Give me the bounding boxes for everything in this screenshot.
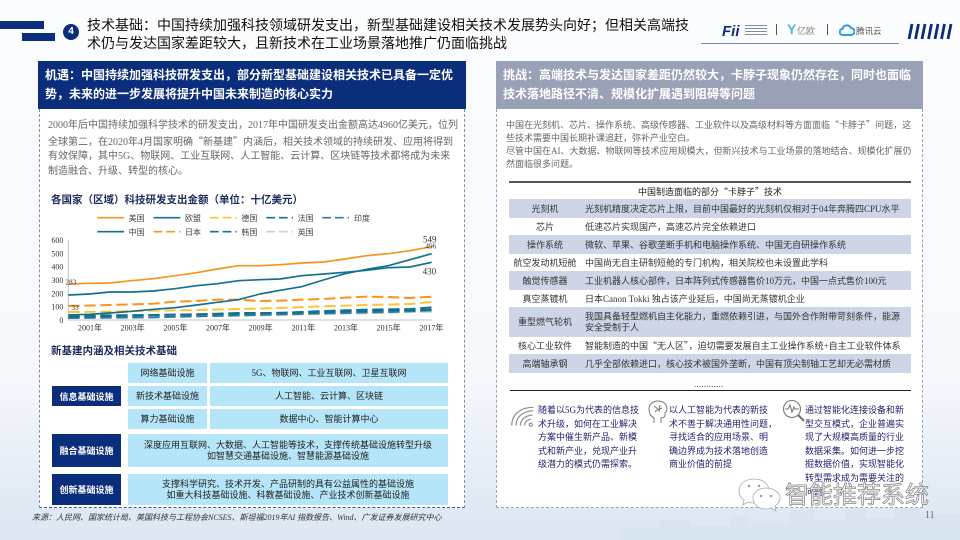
row: 网络: 网络基础设施 bbox=[140, 368, 194, 378]
opportunity text: 有效保障，其中5G、物联网、工业互联网、人工智能、云计算、区块链等技术都将成为未来 bbox=[48, 151, 450, 162]
infrastructure table: 深度应用互联网、大数据、人工智能等技术，支撑传统基础设施转型升级 bbox=[144, 440, 432, 450]
infrastructure table bbox=[52, 363, 448, 505]
legend: 法国 bbox=[298, 213, 314, 223]
challenge text bbox=[506, 118, 912, 169]
category: 融合基础设施 bbox=[52, 434, 121, 467]
data labels bbox=[65, 235, 437, 312]
row: 操作系统 bbox=[509, 235, 911, 254]
challenge text: 中国在光刻机、芯片、操作系统、高级传感器、工业软件以及高级材料等方面面临“卡脖子”问题，这 bbox=[506, 118, 911, 131]
icon: AI head bbox=[648, 400, 668, 423]
row: 航空发动机短舱: 中国尚无自主研制短舱的专门机构，相关院校也未设置此学科 bbox=[585, 257, 828, 267]
axes: 2007年 bbox=[206, 322, 230, 332]
source note: 来源：人民网、国家统计局、美国科技与工程协会NCSES、斯坦福2019年AI 指数报告、Wind、广发证券发展研究中心 bbox=[32, 513, 442, 522]
opportunity text: 2000年后中国持续加强科学技术的研发支出，2017年中国研发支出金额高达4960亿美元，位列 bbox=[48, 120, 458, 131]
challenge text: 然面临很多问题。 bbox=[506, 159, 578, 169]
icon: magnifier bbox=[783, 400, 805, 422]
infrastructure table: 如重大科技基础设施、科教基础设施、产业技术创新基础设施 bbox=[166, 490, 410, 500]
row: 重型燃气轮机 bbox=[509, 307, 911, 337]
row: 操作系统: 微软、苹果、谷歌垄断手机和电脑操作系统、中国无自研操作系统 bbox=[585, 239, 846, 249]
category: 创新基础设施 bbox=[52, 474, 121, 505]
axes: 2015年 bbox=[377, 322, 401, 332]
row: 核心工业软件: 智能制造的中国“无人区”，迫切需要发展自主工业操作系统+自主工业软件体系 bbox=[585, 338, 901, 351]
row: 高端轴承钢: 几乎全部依赖进口，核心技术被国外垄断，中国有顶尖制轴工艺却无必需材质 bbox=[585, 358, 891, 368]
opportunity heading: 机遇：中国持续加强科技研发支出，部分新型基础建设相关技术已具备一定优 bbox=[45, 68, 453, 82]
opportunity text bbox=[48, 119, 458, 176]
row: 高端轴承钢: 高端轴承钢 bbox=[522, 358, 568, 368]
logo: Fii: Fii bbox=[722, 23, 740, 40]
partner logos bbox=[701, 20, 899, 44]
row: 算力 bbox=[128, 409, 207, 429]
panel body bbox=[496, 109, 923, 508]
icon: wechat bbox=[738, 478, 780, 512]
legend: 欧盟 bbox=[185, 213, 201, 223]
row: 光刻机: 光刻机精度决定芯片上限，目前中国最好的光刻机仅相对于04年奔腾四CPU水平 bbox=[585, 203, 900, 213]
watermark bbox=[738, 478, 929, 512]
text: 5G: 方案中催生新产品、新模 bbox=[538, 432, 637, 442]
row: 操作系统: 操作系统 bbox=[527, 239, 563, 249]
legend: 印度 bbox=[354, 213, 370, 223]
challenge heading: 挑战：高端技术与发达国家差距仍然较大，卡脖子现象仍然存在，同时也面临 bbox=[503, 68, 911, 82]
text: data: 问题 bbox=[805, 487, 823, 497]
axes: 2003年 bbox=[121, 322, 145, 332]
text: data: 型交互模式，企业普遍实 bbox=[805, 419, 904, 429]
data labels: 430 bbox=[423, 266, 437, 276]
row: 触觉传感器 bbox=[509, 271, 911, 290]
header accent bars bbox=[0, 21, 55, 41]
axes: 600 bbox=[51, 236, 63, 245]
logo: 亿欧: Y bbox=[787, 21, 796, 37]
row: 真空蒸镀机: 真空蒸镀机 bbox=[522, 293, 568, 303]
axes: 2005年 bbox=[163, 322, 187, 332]
text: AI: 以人工智能为代表的新技 bbox=[669, 405, 768, 415]
decorative stripes bbox=[908, 24, 952, 40]
text: 5G: 级潜力的模式仍需探索。 bbox=[538, 459, 637, 469]
row: 光刻机: 光刻机 bbox=[531, 203, 558, 213]
title bbox=[87, 17, 689, 51]
text: AI: 确边界成为技术落地创造 bbox=[669, 446, 768, 456]
category: 信息基础设施 bbox=[52, 386, 121, 406]
axes bbox=[51, 236, 443, 332]
section number badge: 4 bbox=[68, 26, 74, 37]
partner logos: 亿欧 bbox=[797, 26, 815, 36]
panel: challenge bbox=[496, 61, 923, 508]
row: 重型燃气轮机: 我国具备轻型燃机自主化能力，重燃依赖引进，与国外合作附带苛刻条件，能源 bbox=[585, 312, 900, 322]
text: data: 转型需求成为需要关注的 bbox=[805, 473, 904, 483]
section title: new infrastructure: 新基建内涵及相关技术基础 bbox=[51, 345, 177, 357]
text: AI bbox=[669, 405, 777, 469]
text: data: 现了大规模高质量的行业 bbox=[805, 432, 904, 442]
infrastructure table: 数据中心、智能计算中心 bbox=[279, 414, 378, 424]
legend: 中国 bbox=[129, 227, 145, 237]
logo: 腾讯云 bbox=[839, 24, 855, 36]
legend: 德国 bbox=[241, 213, 257, 223]
section number badge bbox=[63, 24, 79, 40]
legend: 美国 bbox=[129, 213, 145, 223]
text: 5G: 术升级，如何在工业解决 bbox=[538, 419, 637, 429]
partner logos: 腾讯云 bbox=[856, 26, 882, 36]
opportunity heading bbox=[38, 61, 466, 109]
axes: 300 bbox=[51, 276, 63, 285]
row: 网络 bbox=[128, 363, 207, 383]
challenge heading bbox=[496, 61, 923, 109]
text: data: 通过智能化连接设备和新 bbox=[805, 405, 904, 415]
watermark text: 智能推荐系统 bbox=[785, 482, 929, 509]
row: 芯片: 低速芯片实现国产，高速芯片完全依赖进口 bbox=[585, 221, 756, 231]
axes: 2017年 bbox=[419, 322, 443, 332]
axes: 2009年 bbox=[249, 322, 273, 332]
infrastructure table: 如智慧交通基础设施、智慧能源基础设施 bbox=[207, 450, 369, 460]
row: 重型燃气轮机: 重型燃气轮机 bbox=[518, 317, 572, 327]
opportunity heading: 势，未来的进一步发展将提升中国未来制造的核心实力 bbox=[45, 87, 333, 101]
title: 技术基础：中国持续加强科技领域研发支出，新型基础建设相关技术发展势头向好；但相关高端技 bbox=[87, 17, 689, 33]
legend: 英国 bbox=[298, 227, 314, 237]
challenge heading: 技术落地路径不清、规模化扩展遇到阻碍等问题 bbox=[503, 87, 755, 101]
panel body bbox=[39, 109, 465, 508]
category: 创新基础设施: 创新基础设施 bbox=[59, 485, 114, 495]
challenge text: 尽管中国在AI、大数据、物联网等技术应用规模大，但新兴技术与工业场景的落地结合、规模化扩展仍 bbox=[506, 146, 912, 156]
data labels: 549 bbox=[423, 235, 437, 245]
table heading: 中国制造面临的部分“卡脖子”技术 bbox=[638, 185, 782, 198]
axes: 400 bbox=[51, 263, 63, 272]
row: 新技术 bbox=[128, 386, 207, 406]
row: 重型燃气轮机: 安全受制于人 bbox=[585, 322, 639, 332]
data labels: 283 bbox=[65, 277, 77, 286]
legend: 日本 bbox=[185, 227, 201, 237]
axes: 500 bbox=[51, 249, 63, 258]
category: 融合基础设施: 融合基础设施 bbox=[59, 446, 114, 456]
text: 5G: 随着以5G为代表的信息技 bbox=[538, 405, 639, 415]
axes: 200 bbox=[51, 289, 63, 298]
infrastructure table: 支撑科学研究、技术开发、产品研制的具有公益属性的基础设施 bbox=[162, 479, 414, 489]
row: 算力: 算力基础设施 bbox=[140, 414, 194, 424]
axes: 2013年 bbox=[334, 322, 358, 332]
row: 新技术: 新技术基础设施 bbox=[136, 391, 199, 401]
background city silhouette bbox=[620, 490, 960, 540]
row: 航空发动机短舱: 航空发动机短舱 bbox=[513, 257, 576, 267]
axes: 2011年 bbox=[291, 322, 315, 332]
row: 高端轴承钢 bbox=[509, 354, 911, 373]
data labels: 33 bbox=[71, 303, 79, 312]
text: data bbox=[805, 405, 904, 497]
legend: 韩国 bbox=[241, 227, 257, 237]
title: 术仍与发达国家差距较大，且新技术在工业场景落地推广仍面临挑战 bbox=[87, 35, 507, 51]
opportunity text: 制造融合、升级、转型的核心。 bbox=[48, 166, 188, 176]
text: 5G bbox=[538, 405, 639, 469]
axes: 2001年 bbox=[78, 322, 102, 332]
category: 信息基础设施: 信息基础设施 bbox=[59, 392, 114, 402]
data labels: 496 bbox=[425, 242, 437, 251]
row: 核心工业软件: 核心工业软件 bbox=[518, 340, 572, 350]
text: data: 掘数据价值，实现智能化 bbox=[805, 459, 904, 469]
row: 光刻机 bbox=[509, 199, 911, 218]
row: 触觉传感器: 触觉传感器 bbox=[522, 275, 568, 285]
chart title: 各国家（区域）科技研发支出金额（单位：十亿美元） bbox=[51, 194, 303, 206]
panel: opportunity bbox=[38, 61, 466, 508]
row: 触觉传感器: 工业机器人核心部件，日本阵列式传感器售价10万元，中国一点式售价100元 bbox=[585, 275, 887, 285]
line chart bbox=[51, 213, 443, 332]
axes: 0 bbox=[59, 316, 63, 325]
text: AI: 商业价值的前提 bbox=[669, 459, 732, 469]
icon: wifi bbox=[511, 406, 534, 427]
row: 真空蒸镀机: 日本Canon Tokki 独占该产业延后，中国尚无蒸镀机企业 bbox=[585, 293, 805, 303]
infrastructure table: 人工智能、云计算、区块链 bbox=[275, 391, 383, 401]
ellipsis: ............ bbox=[694, 379, 723, 389]
axes: 100 bbox=[51, 303, 63, 312]
page number: 11 bbox=[925, 510, 935, 521]
row: 芯片: 芯片 bbox=[536, 221, 554, 231]
series bbox=[68, 247, 432, 318]
opportunity text: 全球第二，在2020年4月国家明确“新基建”内涵后，相关技术领域的持续研发、应用将得到 bbox=[48, 132, 453, 148]
legend bbox=[97, 213, 370, 237]
text: data: 数据采集。如何进一步挖 bbox=[805, 446, 904, 456]
infrastructure table: 5G、物联网、工业互联网、卫星互联网 bbox=[251, 368, 406, 378]
text: 5G: 式和新产业，兑现产业升 bbox=[538, 446, 637, 456]
text: AI: 术不善于解决通用性问题， bbox=[669, 419, 777, 429]
text: AI: 寻找适合的应用场景、明 bbox=[669, 432, 768, 442]
challenge text: 些技术需要中国长期补课追赶，弥补产业空白。 bbox=[506, 133, 695, 143]
